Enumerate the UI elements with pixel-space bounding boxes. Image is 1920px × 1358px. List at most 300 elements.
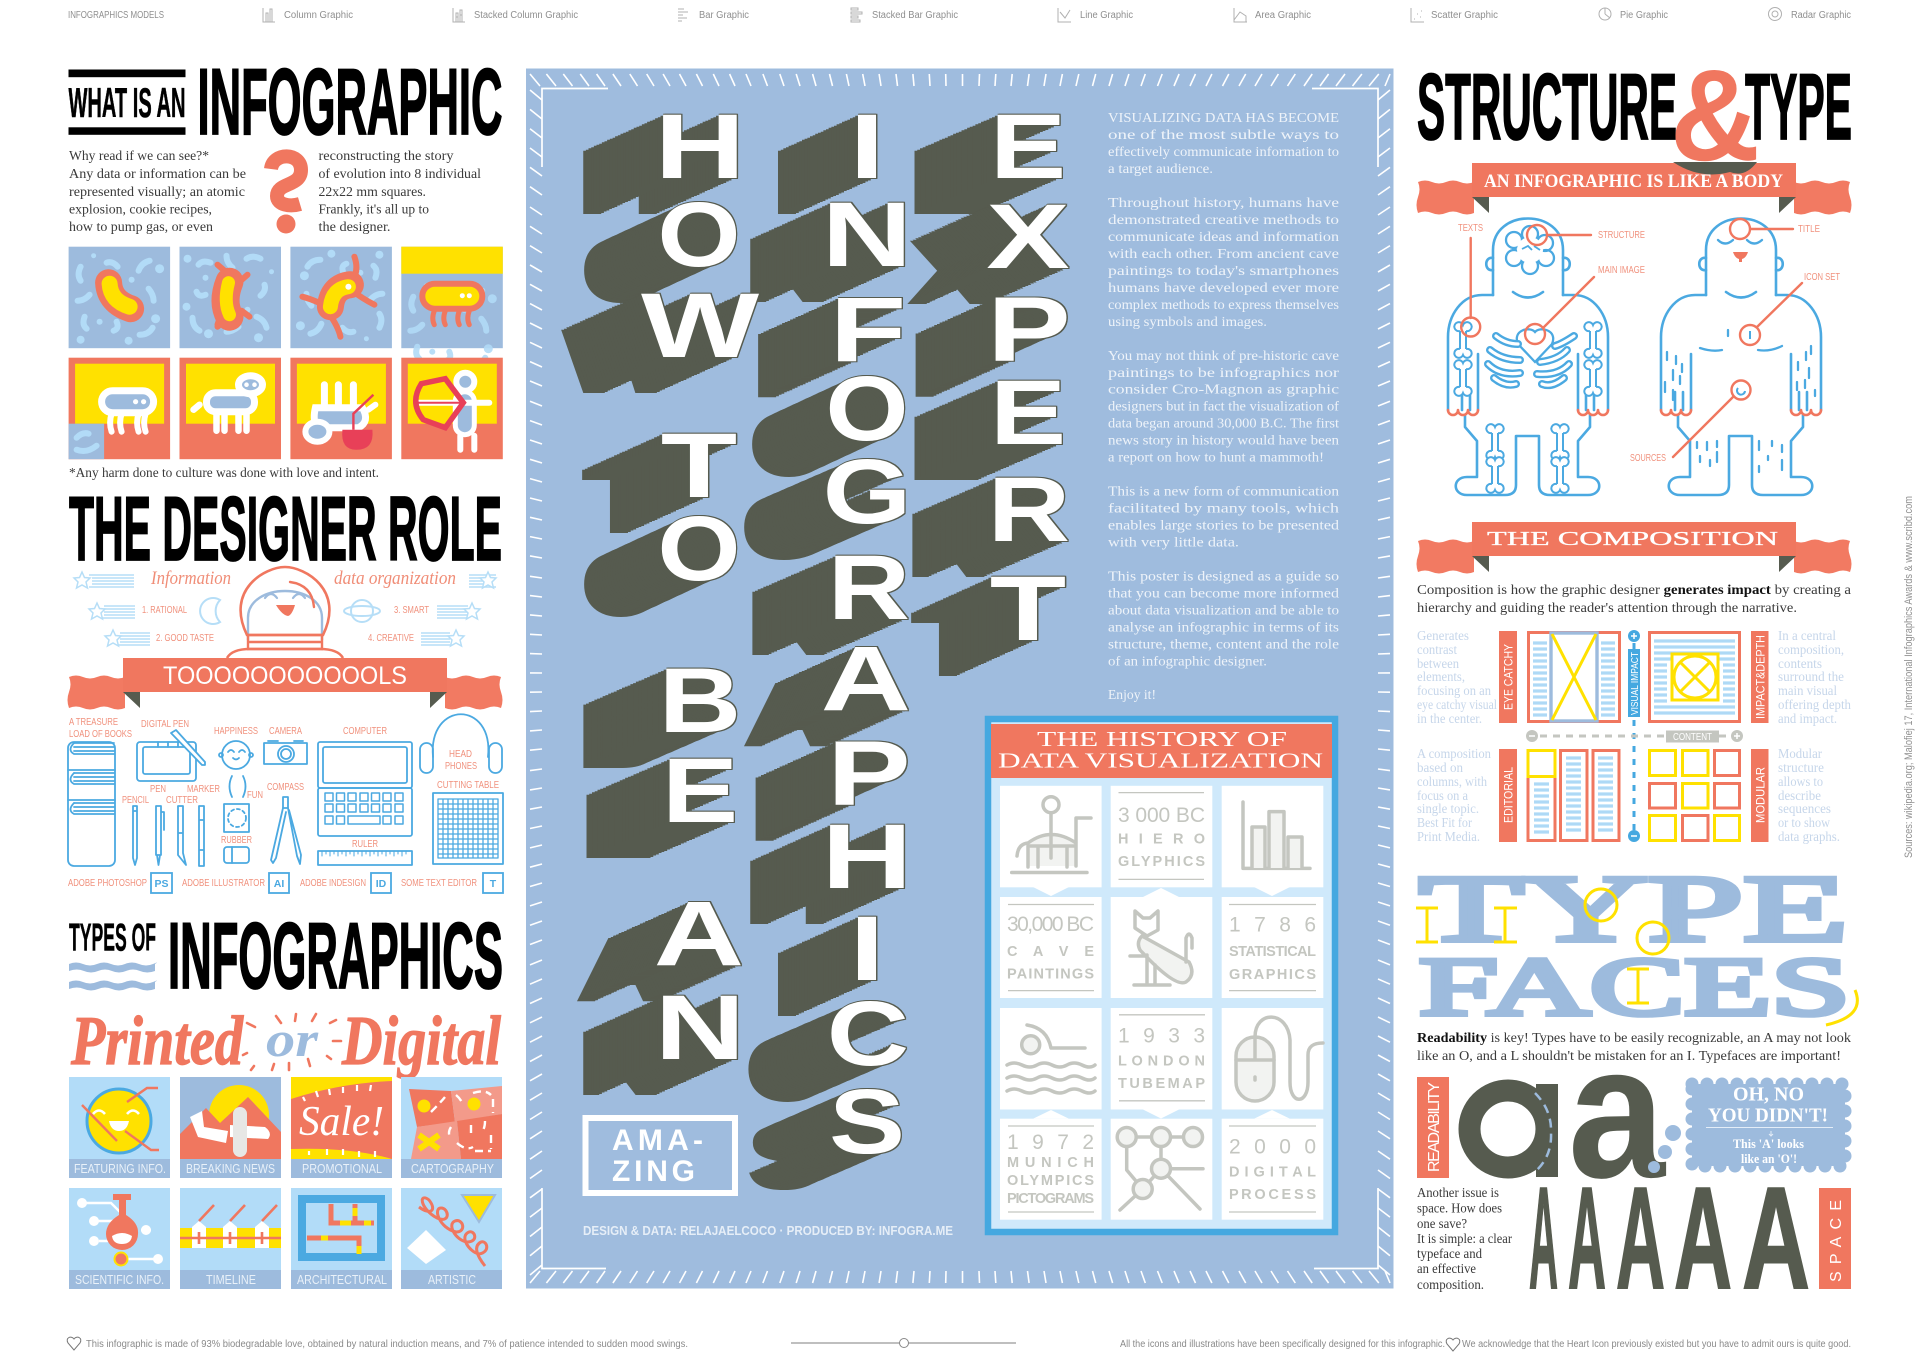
tool labels: DIGITAL PEN <box>141 718 189 730</box>
top navigation: infographics models: Area Graphic <box>1255 10 1311 21</box>
history text: 2000: P R O C E S S <box>1229 1187 1316 1203</box>
history text: 1933: L O N D O N <box>1118 1054 1205 1070</box>
headline: how to be an infographics expert: O <box>825 358 909 460</box>
history text: 1933 <box>1118 1015 1205 1101</box>
text: editorial note: Print Media. <box>1417 829 1480 844</box>
sources note: Sources: wikipedia.org; Malofiej 17, International Infographics Awards & www.scribd.com <box>1903 496 1915 858</box>
text: space note: It is simple: a clear <box>1417 1232 1512 1247</box>
card: scientific info: SCIENTIFIC INFO. <box>75 1273 164 1287</box>
designer qualities with stars: Information <box>150 568 231 589</box>
icon: headphones <box>420 714 502 773</box>
headline: how to be an infographics expert: I <box>850 96 884 198</box>
tool labels <box>69 716 499 850</box>
readability text: like an O, and a L shouldn't be mistaken for an I. Typefaces are important! <box>1417 1049 1841 1064</box>
text: impact and depth note: offering depth <box>1778 697 1851 712</box>
headline: how to be an infographics expert: X <box>986 186 1070 288</box>
intro article text: complex methods to express themselves <box>1108 297 1339 312</box>
icon: books <box>68 742 115 866</box>
lettering: five widths of A: A <box>1674 1157 1732 1319</box>
callouts: hairy body <box>1630 219 1840 464</box>
speech bubble <box>1692 1084 1845 1166</box>
headline: how to be an infographics expert: F <box>830 279 906 381</box>
lettering: five widths of A: A <box>1742 1157 1810 1319</box>
lettering: printed or digital <box>70 1003 501 1080</box>
lettering: five widths of A: A <box>1616 1157 1665 1319</box>
intro text, right column: the designer. <box>318 220 390 235</box>
speech bubble: YOU DIDN'T! <box>1708 1104 1828 1126</box>
top navigation: infographics models: Scatter Graphic <box>1431 10 1498 21</box>
card: breaking news <box>180 1077 281 1178</box>
illustration: skeleton body <box>1448 218 1645 495</box>
intro article text: humans have developed ever more <box>1108 280 1339 295</box>
tool labels: RULER <box>352 838 378 850</box>
top navigation: infographics models: Line Graphic <box>1080 10 1133 21</box>
card: cartography <box>401 1077 502 1178</box>
software list: T <box>490 878 497 890</box>
tool labels: RUBBER <box>221 834 252 846</box>
top navigation: infographics models: Radar Graphic <box>1791 10 1851 21</box>
icon: fun and rubber <box>224 776 249 863</box>
panel: history of data visualization <box>988 719 1335 1232</box>
heading: types of infographics <box>69 903 503 1008</box>
icon: swimmer <box>1007 1025 1095 1093</box>
history text: 3000 BC: H I E R O <box>1118 832 1205 848</box>
intro article text: communicate ideas and information <box>1108 229 1339 244</box>
card: timeline <box>180 1188 281 1289</box>
intro article text: about data visualization and be able to <box>1108 602 1339 617</box>
text: editorial note: single topic. <box>1417 801 1479 816</box>
tool labels: PHONES <box>445 760 477 772</box>
card: artistic: ARTISTIC <box>428 1273 476 1287</box>
intro text, right column <box>318 149 481 235</box>
history text: 1786: STATISTICAL <box>1229 944 1316 960</box>
headline: how to be an infographics expert: O <box>657 498 741 600</box>
readability text <box>1417 1031 1851 1064</box>
ribbon: tools: TOOOOOOOOOOOLS <box>163 662 407 690</box>
headline: how to be an infographics expert: I <box>850 898 884 1000</box>
card: breaking news: BREAKING NEWS <box>186 1162 275 1176</box>
footer slider <box>791 1338 1016 1348</box>
text: editorial note: based on <box>1417 760 1463 775</box>
history text: 30000 BC <box>1007 904 1094 991</box>
top navigation: infographics models: Pie Graphic <box>1620 10 1668 21</box>
readability text: Readability is key! Types have to be easily recognizable, an A may not look <box>1417 1031 1851 1046</box>
text: modular note: sequences <box>1778 801 1831 816</box>
square: wounded beast <box>290 358 392 459</box>
text: space note: space. How does <box>1417 1202 1502 1216</box>
intro article text: consider Cro-Magnon as graphic <box>1108 382 1339 397</box>
icon: tube map <box>1117 1128 1203 1210</box>
footnote: *Any harm done to culture was done with love and intent. <box>69 466 379 481</box>
text: eye catchy note <box>1417 628 1497 726</box>
tool labels: FUN <box>247 789 263 801</box>
square: creature on land <box>69 358 170 459</box>
lettering: typefaces: TYPE <box>1419 856 1848 962</box>
history text: 3000 BC: 3 000 BC <box>1118 804 1205 827</box>
square: archer <box>401 358 503 459</box>
intro article text: demonstrated creative methods to <box>1108 212 1339 227</box>
tools illustration <box>68 714 503 866</box>
composition side labels: IMPACT&DEPTH <box>1754 635 1768 719</box>
lettering: typefaces <box>1416 856 1857 1032</box>
card: architectural <box>291 1188 392 1289</box>
ribbon: the composition <box>1416 522 1852 574</box>
software list: ADOBE INDESIGN <box>300 877 366 889</box>
headline: how to be an infographics expert: G <box>823 441 911 543</box>
square: cell with tendrils <box>290 247 392 348</box>
icon: cutting table <box>433 793 503 864</box>
intro article text <box>1108 110 1340 702</box>
composition side labels <box>1499 631 1768 842</box>
intro article text: This poster is designed as a guide so <box>1108 568 1339 583</box>
card: artistic <box>401 1188 502 1289</box>
intro article text: using symbols and images. <box>1108 314 1267 329</box>
badge: amazing: ZING <box>612 1155 695 1188</box>
text: modular note: or to show <box>1778 815 1830 830</box>
panel: history of data visualization: DATA VISUALIZATION <box>998 748 1323 772</box>
label: space: SPACE <box>1828 1200 1845 1282</box>
headline: how to be an infographics expert: H <box>655 96 745 198</box>
intro text, right column: reconstructing the story <box>318 149 454 164</box>
composition side labels: MODULAR <box>1754 767 1768 823</box>
software list: ID <box>376 878 387 890</box>
callouts: skeleton body <box>1458 222 1645 344</box>
intro text, left column: Any data or information can be <box>69 167 246 182</box>
footer right note: All the icons and illustrations have been specifically designed for this infographic. <box>1120 1339 1445 1350</box>
intro article text: data began around 30,000 B.C. The first <box>1108 416 1339 431</box>
text: space note: composition. <box>1417 1278 1484 1293</box>
designer qualities with stars <box>74 568 496 646</box>
intro article text: Enjoy it! <box>1108 687 1156 702</box>
intro article text: effectively communicate information to <box>1108 144 1339 159</box>
history text: 1786 <box>1229 904 1316 991</box>
software list: SOME TEXT EDITOR <box>401 877 477 889</box>
top navigation: infographics models: INFOGRAPHICS MODELS <box>68 10 164 21</box>
heading: types of infographics: TYPES OF <box>69 916 156 960</box>
headline: how to be an infographics expert: E <box>990 362 1066 464</box>
icon: pens and pencils <box>133 806 204 866</box>
icon: astronaut designer <box>227 567 343 658</box>
icon: camera <box>264 741 307 764</box>
ampersand: & <box>1670 42 1760 188</box>
card: scientific info <box>69 1188 170 1289</box>
lettering: printed or digital: or <box>266 1011 319 1067</box>
designer qualities with stars: data organization <box>334 568 456 589</box>
software list: PS <box>154 878 169 890</box>
designer qualities with stars: 2. GOOD TASTE <box>156 632 214 644</box>
intro text, left column <box>69 149 246 235</box>
card: featuring info <box>69 1077 170 1178</box>
intro text, right column: Frankly, it's all up to <box>318 202 429 218</box>
text: eye catchy note: in the center. <box>1417 711 1482 726</box>
callouts: hairy body: SOURCES <box>1630 452 1666 464</box>
composition description: hierarchy and guiding the reader's attention through the narrative. <box>1417 601 1797 616</box>
card: promotional <box>291 1077 392 1178</box>
history text: 2000: 2 0 0 0 <box>1229 1136 1316 1158</box>
text: editorial note: A composition <box>1417 746 1491 761</box>
headline: how to be an infographics expert: E <box>990 96 1066 198</box>
ribbon: the composition: THE COMPOSITION <box>1487 528 1778 550</box>
intro text, right column: of evolution into 8 individual <box>318 167 481 182</box>
axis: content: CONTENT <box>1673 732 1712 743</box>
layout: central <box>1650 632 1740 722</box>
tool labels: PEN <box>150 783 166 795</box>
card: promotional: PROMOTIONAL <box>302 1162 382 1176</box>
text: eye catchy note: elements, <box>1417 669 1465 684</box>
square: cell with nubs <box>180 247 281 348</box>
illustration: two letter a comparison <box>1470 1006 1681 1218</box>
intro article text: a target audience. <box>1108 161 1213 176</box>
tool labels: PENCIL <box>122 794 149 806</box>
icon: bar chart <box>1243 802 1310 868</box>
composition side labels: EYE CATCHY <box>1502 644 1516 710</box>
headline: how to be an infographics expert: W <box>641 275 759 377</box>
intro article text: structure, theme, content and the role <box>1108 636 1339 651</box>
composition description <box>1417 583 1852 616</box>
intro article text: one of the most subtle ways to <box>1108 127 1339 142</box>
speech bubble: like an 'O'! <box>1741 1152 1797 1166</box>
headline: how to be an infographics expert: T <box>990 558 1066 660</box>
tool labels: CUTTING TABLE <box>437 779 499 791</box>
tool labels: CAMERA <box>269 725 302 737</box>
intro article text: news story in history would have been <box>1108 433 1339 448</box>
headline: how to be an infographics expert: A <box>654 883 744 985</box>
lettering: five widths of A <box>1529 1157 1810 1319</box>
axis: visual impact <box>1628 630 1641 842</box>
text: space note: Another issue is <box>1417 1186 1499 1201</box>
intro article text: analyse an infographic in terms of its <box>1108 619 1339 634</box>
heading: what is an infographic: WHAT IS AN <box>68 79 186 126</box>
ribbon: tools <box>68 658 502 710</box>
intro article text: paintings to today's smartphones <box>1108 263 1339 278</box>
axis: visual impact: VISUAL IMPACT <box>1629 652 1641 715</box>
text: space note: typeface and <box>1417 1247 1482 1262</box>
badge: amazing: AMA- <box>612 1124 703 1157</box>
history text: 1972 <box>1007 1126 1094 1212</box>
headline: how to be an infographics expert: P <box>827 723 911 825</box>
card: promotional: Sale! <box>299 1099 384 1145</box>
text: eye catchy note: Generates <box>1417 628 1469 643</box>
history text: 1786: 1 7 8 6 <box>1229 914 1316 936</box>
square: sheep creature <box>180 358 281 459</box>
intro text, left column: Why read if we can see?* <box>69 149 209 164</box>
history text: 1972: M U N I C H <box>1007 1155 1094 1171</box>
tool labels: HEAD <box>449 748 472 760</box>
illustration: two letter a comparison: a <box>1568 1006 1666 1218</box>
lettering: five widths of A: A <box>1568 1157 1606 1319</box>
icon: computer mouse <box>1236 1017 1323 1101</box>
heading: what is an infographic <box>68 49 502 154</box>
intro article text: with each other. From ancient cave <box>1108 246 1339 261</box>
headline: how to be an infographics expert: S <box>829 1071 905 1173</box>
software list: AI <box>274 878 284 890</box>
text: editorial note: focus on a <box>1417 788 1468 803</box>
intro text, right column: 22x22 mm squares. <box>318 185 426 200</box>
footer left note: This infographic is made of 93% biodegradable love, obtained by natural induction means, and 7% of patience intended to sudden mood swings. <box>86 1339 688 1350</box>
layout: eye catchy <box>1528 632 1620 722</box>
top navigation: infographics models: Stacked Bar Graphic <box>872 10 958 21</box>
card: timeline: TIMELINE <box>206 1273 256 1287</box>
text: impact and depth note: composition, <box>1778 642 1844 657</box>
card: featuring info: FEATURING INFO. <box>74 1162 166 1176</box>
card: cartography: CARTOGRAPHY <box>411 1162 495 1176</box>
intro article text: paintings to be infographics nor <box>1108 365 1340 380</box>
headline: how to be an infographics expert: R <box>988 459 1070 561</box>
icon: computer <box>318 742 412 836</box>
text: modular note: structure <box>1778 760 1824 775</box>
label: readability: READABILITY <box>1426 1082 1443 1172</box>
text: eye catchy note: between <box>1417 656 1459 671</box>
text: impact and depth note: contents <box>1778 656 1822 671</box>
ribbon: an infographic is like a body: AN INFOGRAPHIC IS LIKE A BODY <box>1484 172 1784 192</box>
tool labels: MARKER <box>187 783 220 795</box>
label: readability <box>1417 1077 1449 1178</box>
software list: ADOBE PHOTOSHOP <box>68 877 147 889</box>
footer right note <box>1120 1338 1851 1351</box>
designer qualities with stars: 3. SMART <box>394 604 429 616</box>
panel: history of data visualization: THE HISTORY OF <box>1037 727 1287 751</box>
icon: egyptian cat <box>1130 911 1192 985</box>
callouts: skeleton body: MAIN IMAGE <box>1598 264 1645 276</box>
ribbon: an infographic is like a body <box>1416 162 1852 214</box>
layout: editorial <box>1528 750 1619 840</box>
intro article text: a report on how to hunt a mammoth! <box>1108 450 1324 465</box>
icon: cave animal <box>1012 797 1091 872</box>
history text: 1972: 1 9 7 2 <box>1007 1131 1094 1154</box>
headline: how to be an infographics expert: T <box>661 415 737 517</box>
headline: how to be an infographics expert: B <box>659 650 741 752</box>
layout: modular <box>1650 750 1740 840</box>
headline: how to be an infographics expert: N <box>822 184 912 286</box>
top navigation: infographics models <box>68 8 1851 22</box>
text: space note: an effective <box>1417 1262 1476 1277</box>
evolution squares grid <box>69 247 503 459</box>
tool labels: COMPUTER <box>343 725 387 737</box>
axis: content <box>1526 730 1743 743</box>
headline: how to be an infographics expert: C <box>827 983 909 1085</box>
history text: 30000 BC: 30,000 BC <box>1007 913 1094 936</box>
text: editorial note <box>1417 746 1491 844</box>
text: eye catchy note: contrast <box>1417 642 1457 657</box>
history text: 3000 BC <box>1118 793 1205 879</box>
card: architectural: ARCHITECTURAL <box>297 1273 387 1287</box>
intro article text: that you can become more informed <box>1108 585 1339 600</box>
text: THE DESIGNER ROLE <box>69 479 502 580</box>
text: impact and depth note: In a central <box>1778 628 1836 643</box>
lettering: five widths of A: A <box>1529 1157 1558 1319</box>
illustration: hairy body <box>1630 218 1840 495</box>
intro text, left column: how to pump gas, or even <box>69 220 213 235</box>
lettering: printed or digital: Printed <box>70 1003 244 1080</box>
label: space <box>1819 1188 1851 1289</box>
tool labels: CUTTER <box>166 794 198 806</box>
text: modular note: allows to <box>1778 774 1823 789</box>
intro article text: VISUALIZING DATA HAS BECOME <box>1108 110 1339 125</box>
callouts: hairy body: ICON SET <box>1804 271 1840 283</box>
text: modular note: describe <box>1778 788 1821 803</box>
headline: how to be an infographics expert: O <box>657 184 741 286</box>
badge: amazing <box>586 1118 735 1193</box>
text: eye catchy note: focusing on an <box>1417 683 1491 698</box>
text: modular note: data graphs. <box>1778 829 1840 844</box>
history text: 30000 BC: C A V E <box>1007 944 1094 960</box>
history text: 30000 BC: PAINTINGS <box>1007 967 1094 983</box>
history text: 1933: 1 9 3 3 <box>1118 1024 1205 1047</box>
text: modular note <box>1778 746 1840 844</box>
software list <box>68 873 503 893</box>
tool labels: A TREASURE <box>69 716 118 728</box>
text: editorial note: Best Fit for <box>1417 815 1472 830</box>
text: modular note: Modular <box>1778 746 1822 761</box>
composition side labels: EDITORIAL <box>1502 767 1516 823</box>
top navigation: infographics models: Stacked Column Graphic <box>474 10 578 21</box>
text: INFOGRAPHICS <box>168 903 503 1008</box>
headline: how to be an infographics expert: N <box>655 977 745 1079</box>
designer qualities with stars: 4. CREATIVE <box>368 632 414 644</box>
text: editorial note: columns, with <box>1417 774 1487 789</box>
intro article text: Throughout history, humans have <box>1108 195 1339 210</box>
top navigation: infographics models: Bar Graphic <box>699 10 749 21</box>
headline: how to be an infographics expert: R <box>828 537 910 639</box>
headline: how to be an infographics expert: E <box>662 740 738 842</box>
history text: 3000 BC: GLYPHICS <box>1118 854 1205 870</box>
history text: 2000 <box>1229 1126 1316 1212</box>
intro article text: with very little data. <box>1108 534 1239 550</box>
headline: how to be an infographics expert: A <box>821 628 911 730</box>
history cell backgrounds <box>1000 786 1323 1220</box>
credits: DESIGN & DATA: RELAJAELCOCO · PRODUCED BY: INFOGRA.ME <box>583 1224 953 1238</box>
intro article text: You may not think of pre-historic cave <box>1108 348 1339 363</box>
tool labels: COMPASS <box>267 781 304 793</box>
intro article text: enables large stories to be presented <box>1108 518 1339 532</box>
intro article text: facilitated by many tools, which <box>1108 500 1339 516</box>
composition description: Composition is how the graphic designer generates impact by creating a <box>1417 583 1852 598</box>
icon: digital pen tablet <box>137 730 205 781</box>
headline: how to be an infographics expert: P <box>987 279 1071 381</box>
icon: question mark <box>271 156 301 234</box>
history text: 2000: D I G I T A L <box>1229 1165 1316 1181</box>
text: space note: one save? <box>1417 1217 1467 1232</box>
text: impact and depth note: main visual <box>1778 683 1837 698</box>
speech bubble: This 'A' looks <box>1733 1137 1804 1151</box>
text: INFOGRAPHIC <box>198 49 502 154</box>
intro article text: of an infographic designer. <box>1108 653 1267 668</box>
icon: ruler <box>318 851 412 865</box>
text: impact and depth note: surround the <box>1778 669 1844 684</box>
history text: 1933: TUBEMAP <box>1118 1076 1205 1092</box>
history text: 1786: GRAPHICS <box>1229 967 1316 983</box>
history text: 1972: OLYMPICS <box>1007 1173 1094 1189</box>
top navigation: infographics models: Column Graphic <box>284 10 353 21</box>
designer qualities with stars: 1. RATIONAL <box>142 604 187 616</box>
headline: how to be an infographics expert <box>561 96 1071 1190</box>
intro article text: This is a new form of communication <box>1108 484 1339 498</box>
intro text, left column: explosion, cookie recipes, <box>69 202 212 218</box>
callouts: skeleton body: TEXTS <box>1458 222 1483 234</box>
lettering: printed or digital: Digital <box>341 1003 501 1080</box>
square: cell <box>69 247 170 348</box>
square: multi-legged creature <box>401 247 503 375</box>
callouts: hairy body: TITLE <box>1798 223 1820 235</box>
text: impact and depth note: and impact. <box>1778 711 1837 726</box>
software list: ADOBE ILLUSTRATOR <box>182 877 265 889</box>
icon: compass <box>271 797 301 864</box>
lettering: typefaces: FACES <box>1419 940 1850 1032</box>
footer right note: We acknowledge that the Heart Icon previously existed but you have to admit ours is quite good. <box>1462 1339 1851 1350</box>
intro text, left column: represented visually; an atomic <box>69 185 245 200</box>
icon: happy face <box>219 741 253 769</box>
tool labels: HAPPINESS <box>214 725 258 737</box>
